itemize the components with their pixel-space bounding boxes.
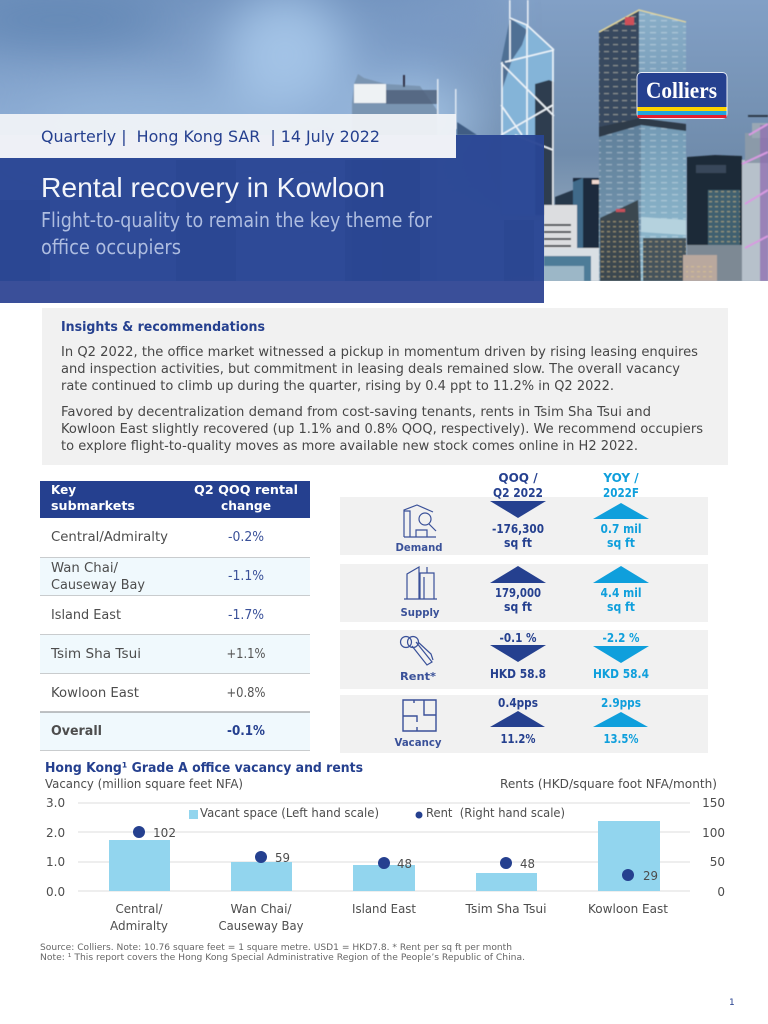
right axis labels: 50 (710, 855, 725, 869)
left building behind panel (352, 74, 438, 114)
left axis labels: 0.0 (46, 885, 65, 899)
right axis labels (702, 796, 725, 899)
heading: insights: Insights & recommendations (61, 320, 265, 335)
indicator: supply: sq ft (607, 600, 635, 614)
indicator: rent: -2.2 % (602, 631, 640, 645)
table header: submarkets (51, 498, 135, 513)
left axis title: Vacancy (million square feet NFA) (45, 777, 243, 791)
row: Wan Chai/Causeway Bay: -1.1% (228, 569, 264, 584)
title: Rental recovery in Kowloon (41, 172, 385, 203)
right axis labels: 100 (702, 826, 725, 840)
table header: Key (51, 482, 76, 497)
paragraph one: and inspection activities, but commitment in leasing deals remained slow. The overall vacancy (61, 362, 680, 377)
row: Wan Chai/Causeway Bay (51, 561, 264, 593)
Cheung Kong tower (599, 10, 639, 130)
indicator: demand (396, 501, 649, 554)
left axis labels: 2.0 (46, 826, 65, 840)
category labels: Admiralty (110, 919, 168, 933)
panel: insights and recommendations (42, 308, 728, 465)
icon: keys (400, 636, 433, 665)
legend: Rent (Right hand scale) (426, 806, 565, 820)
category labels (110, 902, 668, 933)
column heading: YOY: YOY / (602, 471, 639, 485)
indicator: supply: 4.4 mil (600, 586, 642, 600)
page number: 1 (729, 998, 735, 1008)
bars (109, 821, 660, 891)
row: Kowloon East: +0.8% (226, 686, 266, 701)
table header (40, 481, 310, 518)
row: Central/Admiralty: Central/Admiralty (51, 530, 168, 545)
indicator: demand: sq ft (607, 536, 635, 550)
blue title panel (0, 135, 544, 303)
paragraph two: Kowloon East slightly recovered (up 1.1% and 0.8% QOQ, respectively). We recommend occupiers (61, 422, 703, 437)
indicator: vacancy: 11.2% (500, 732, 536, 746)
icon: floor plan (403, 700, 436, 731)
logo: Colliers: Colliers (646, 78, 717, 103)
Bank of China (509, 0, 511, 20)
column heading: QOQ: Q2 2022 (493, 486, 543, 500)
indicator: demand: Demand (396, 541, 442, 554)
indicator: supply: Supply (400, 606, 440, 619)
paragraph two: Favored by decentralization demand from cost-saving tenants, rents in Tsim Sha Tsui and (61, 405, 651, 420)
row: Kowloon East: Kowloon East (51, 686, 139, 701)
indicator: supply: sq ft (504, 600, 532, 614)
rent value labels (153, 826, 658, 883)
subtitle (41, 208, 433, 259)
column heading: YOY: 2022F (603, 486, 639, 500)
row: Central/Admiralty: -0.2% (228, 530, 264, 545)
subtitle: office occupiers (41, 235, 181, 259)
icon: towers (404, 567, 437, 599)
indicator: supply: 179,000 (495, 586, 541, 600)
panel: market indicators (340, 471, 708, 753)
dark hill and right buildings (687, 155, 742, 248)
column heading: YOY (602, 471, 639, 500)
row: Wan Chai/Causeway Bay: Causeway Bay (51, 578, 145, 593)
row: Tsim Sha Tsui: +1.1% (226, 647, 266, 662)
row: Overall: Overall (51, 724, 102, 739)
category labels: Wan Chai/ (230, 902, 292, 916)
indicator: supply (400, 566, 649, 619)
row: Kowloon East (51, 686, 266, 701)
paragraph one: In Q2 2022, the office market witnessed a pickup in momentum driven by rising leasing enquires (61, 345, 698, 360)
row: Overall: -0.1% (227, 724, 265, 739)
rent value labels: 29 (643, 869, 658, 883)
left axis labels (46, 796, 65, 899)
white date strip (0, 114, 456, 158)
indicator: rent (400, 631, 649, 683)
column heading: QOQ: QOQ / (498, 471, 538, 485)
row: Wan Chai/Causeway Bay: Wan Chai/ (51, 561, 119, 576)
legend: Vacant space (Left hand scale) (200, 806, 379, 820)
category labels: Island East (352, 902, 416, 916)
rent dots (133, 826, 634, 881)
indicator: demand: -176,300 (492, 522, 544, 536)
left axis labels: 3.0 (46, 796, 65, 810)
indicator: rent: Rent* (400, 670, 436, 683)
rent value labels: 59 (275, 851, 290, 865)
paragraph one (61, 345, 698, 394)
row: Island East: Island East (51, 608, 121, 623)
icon: office with magnifier (404, 505, 436, 537)
table: key submarkets rental change (40, 481, 310, 751)
row: Tsim Sha Tsui (50, 647, 266, 662)
indicator: rent: HKD 58.8 (490, 667, 546, 681)
indicator: rent: -0.1 % (500, 631, 536, 645)
paragraph one: rate continued to climb up during the quarter, rising by 0.4 ppt to 11.2% in Q2 2022. (61, 379, 614, 394)
row: Island East: -1.7% (228, 608, 264, 623)
column heading: QOQ (493, 471, 543, 500)
left axis labels: 1.0 (46, 855, 65, 869)
indicator: vacancy: 2.9pps (601, 696, 641, 710)
indicator: rent: HKD 58.4 (593, 667, 649, 681)
right axis title: Rents (HKD/square foot NFA/month) (500, 777, 717, 791)
source notes (40, 943, 525, 963)
indicator: demand: sq ft (504, 536, 532, 550)
indicator: vacancy: 13.5% (604, 732, 638, 746)
rent value labels: 102 (153, 826, 176, 840)
header photo: Hong Kong skyline (0, 0, 768, 281)
indicator: vacancy: Vacancy (394, 736, 442, 749)
white striped building (544, 205, 577, 250)
indicator: demand: 0.7 mil (600, 522, 642, 536)
source notes: Note: ¹ This report covers the Hong Kong Special Administrative Region of the People’s Republic of China. (40, 953, 525, 963)
low podium (544, 247, 600, 281)
category labels: Kowloon East (588, 902, 668, 916)
row: Overall (51, 724, 265, 739)
category labels: Causeway Bay (218, 919, 304, 933)
paragraph two (61, 405, 703, 454)
logo: Colliers (636, 72, 728, 119)
table header: change (221, 498, 271, 513)
right axis labels: 0 (717, 885, 725, 899)
category labels: Central/ (116, 902, 163, 916)
legend (189, 806, 565, 820)
dateline: Quarterly | Hong Kong SAR | 14 July 2022 (41, 127, 380, 146)
chart: vacancy bars and rent dots (46, 796, 725, 933)
table header: Q2 QOQ rental (194, 482, 298, 497)
row: Central/Admiralty (51, 530, 264, 545)
indicator: vacancy (394, 696, 648, 749)
source notes: Source: Colliers. Note: 10.76 square feet = 1 square metre. USD1 = HKD7.8. * Rent per sq ft per month (40, 943, 512, 953)
indicator: vacancy: 0.4pps (498, 696, 538, 710)
rent value labels: 48 (520, 857, 535, 871)
category labels: Tsim Sha Tsui (464, 902, 546, 916)
chart heading: Hong Kong¹ Grade A office vacancy and rents (45, 760, 363, 776)
paragraph two: to explore flight-to-quality moves as more available new stock comes online in H2 2022. (61, 439, 638, 454)
row backgrounds (340, 497, 708, 753)
subtitle: Flight-to-quality to remain the key theme for (41, 208, 433, 232)
rent value labels: 48 (397, 857, 412, 871)
right axis labels: 150 (702, 796, 725, 810)
hill and dark mid building (554, 190, 574, 206)
row: Island East (51, 608, 264, 623)
row: Tsim Sha Tsui: Tsim Sha Tsui (50, 647, 141, 662)
